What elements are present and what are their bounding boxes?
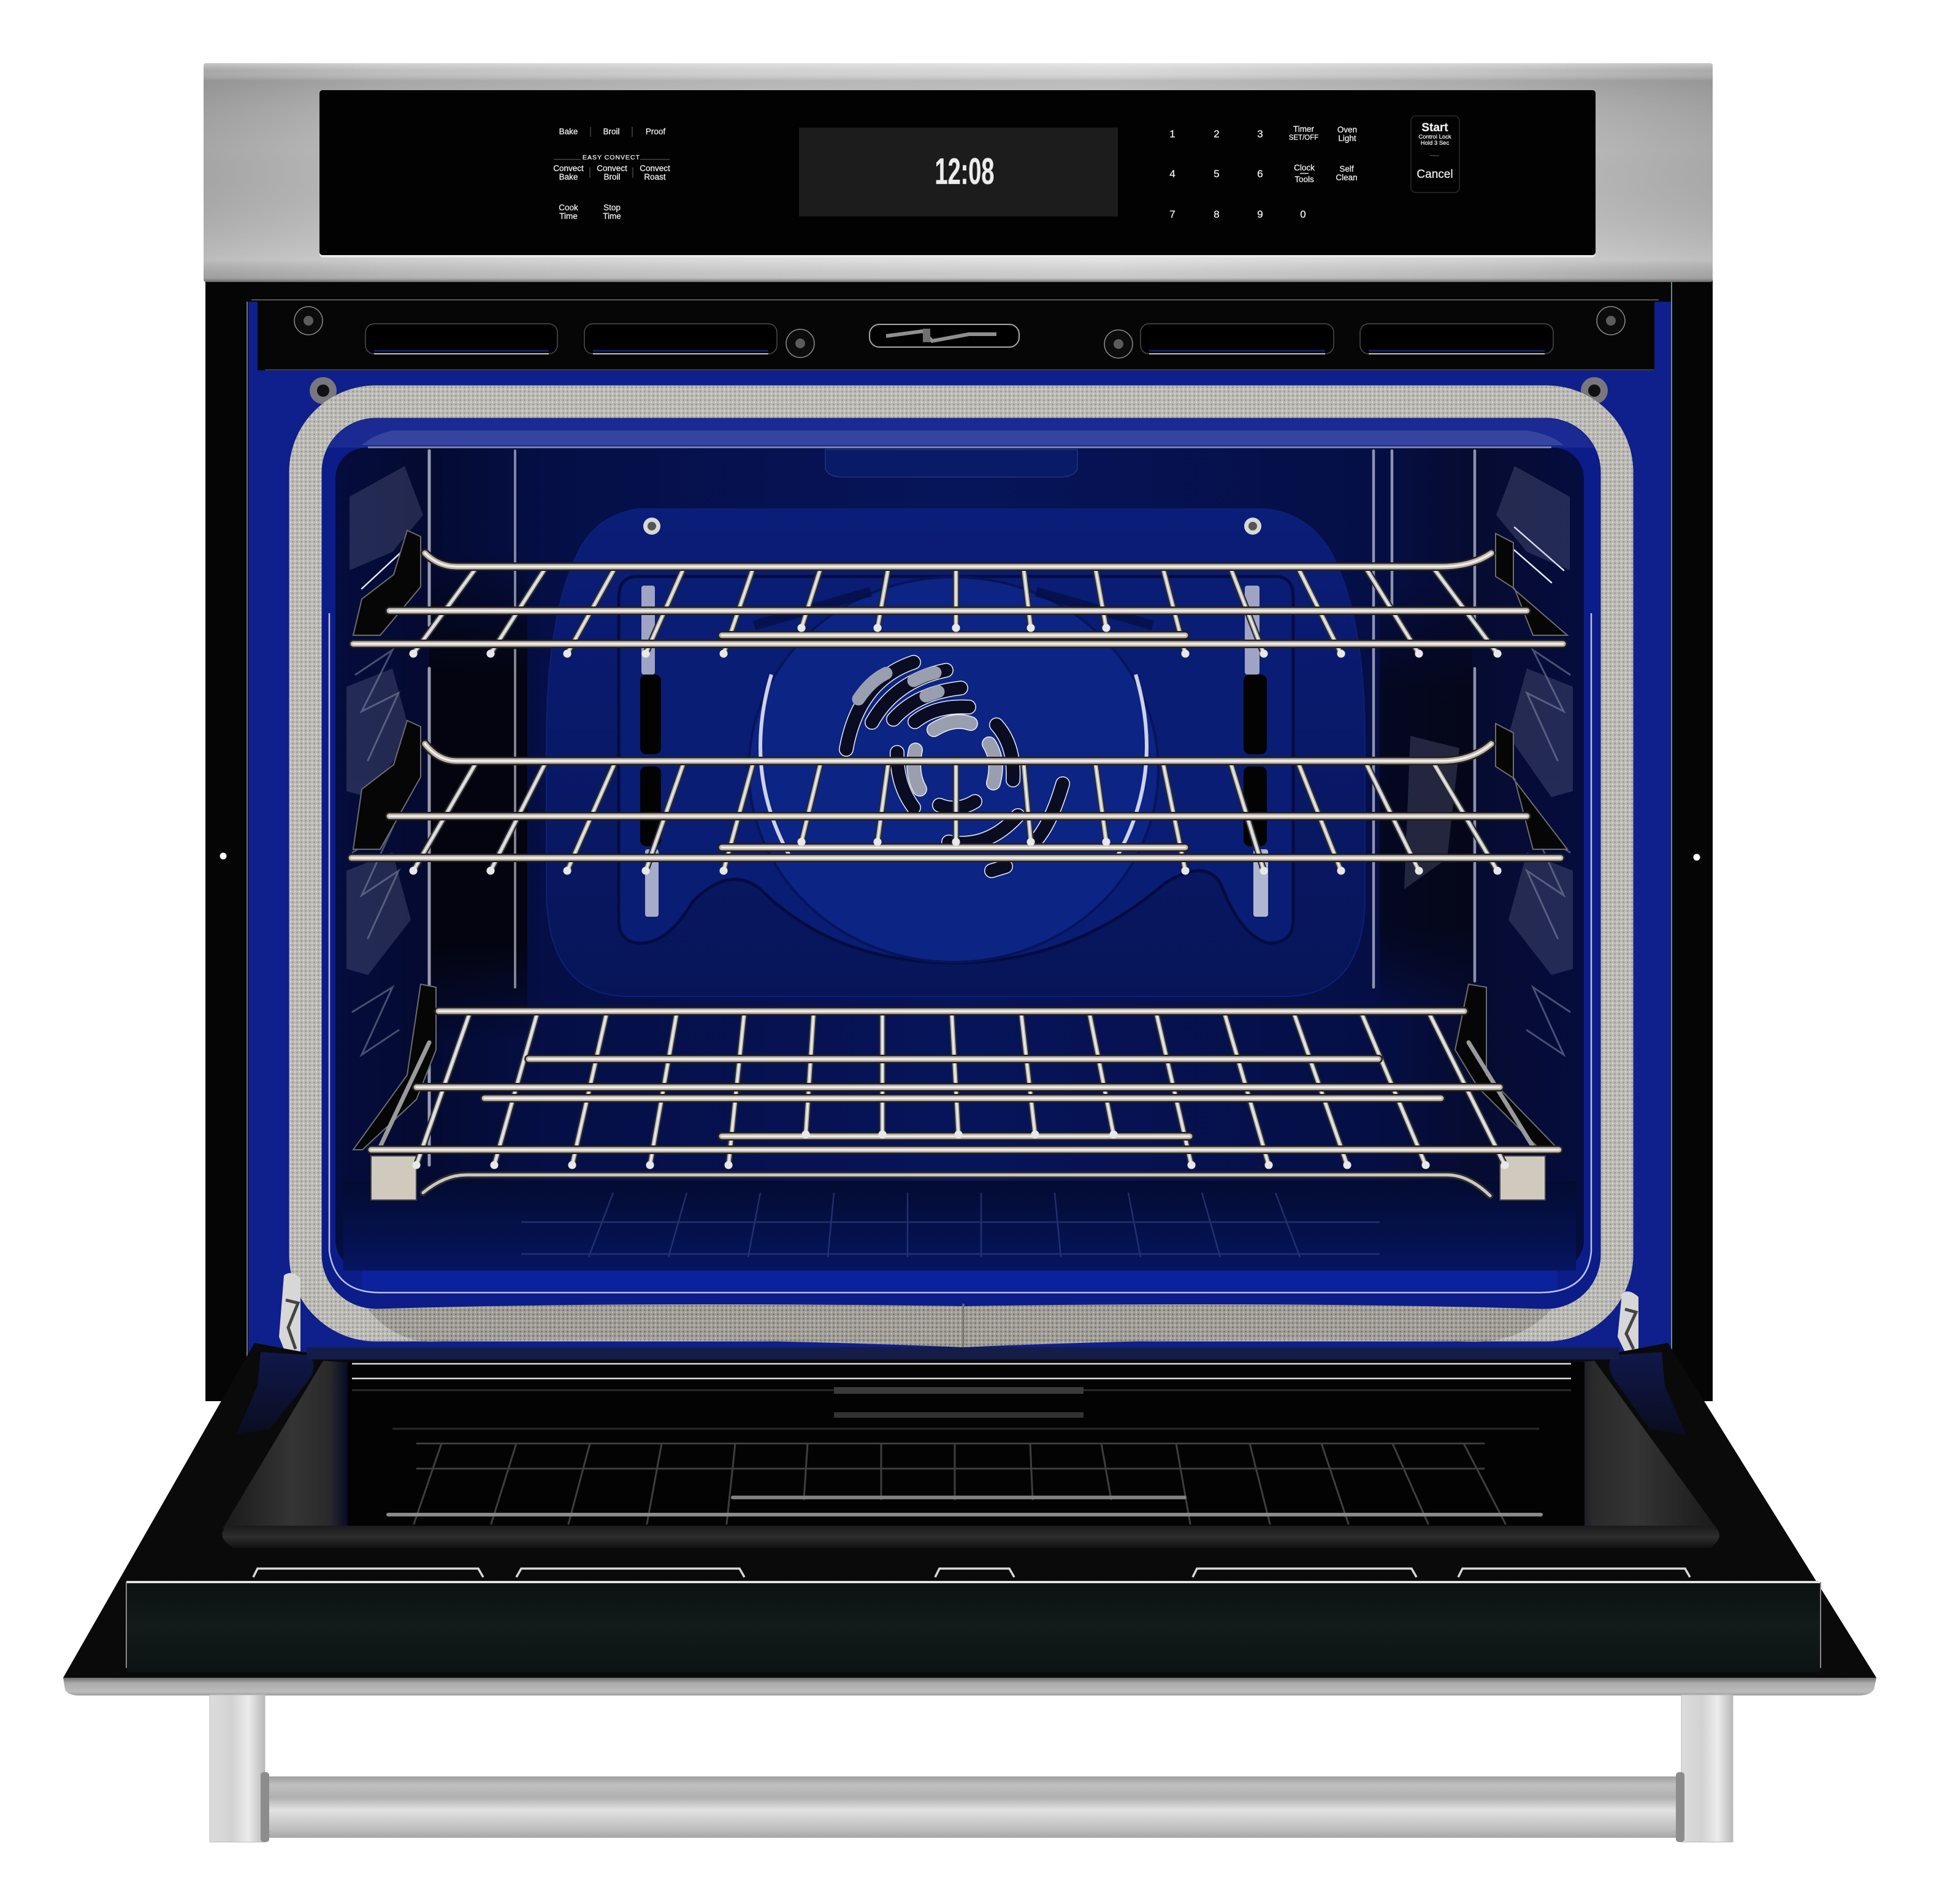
fan vent openings xyxy=(846,662,1063,871)
handle collars xyxy=(261,1772,1684,1842)
rack hook brackets xyxy=(353,530,1567,1150)
strip screws xyxy=(294,307,1625,358)
middle oven rack xyxy=(351,744,1561,871)
number keypad: 3 xyxy=(1257,128,1263,140)
dark side wall bands xyxy=(429,552,1472,1042)
number keypad: 7 xyxy=(1169,208,1176,220)
door top reflection xyxy=(236,1352,313,1435)
number keypad: 0 xyxy=(1300,208,1306,220)
handle bracket right xyxy=(1681,1695,1733,1842)
cooking mode labels: Time xyxy=(603,212,621,221)
number keypad: 4 xyxy=(1169,168,1176,180)
cooking mode labels: Roast xyxy=(644,172,666,182)
slide rail xyxy=(371,1042,1545,1200)
door handle xyxy=(210,1695,1733,1842)
function key labels xyxy=(1289,124,1358,184)
number keypad: 8 xyxy=(1214,208,1220,220)
reflected rack in door xyxy=(388,1443,1541,1524)
function key labels: Timer xyxy=(1293,124,1314,134)
cooking mode labels: Broil xyxy=(603,172,621,182)
start and cancel key: Cancel xyxy=(1416,168,1453,181)
cooking mode labels: Proof xyxy=(646,127,665,136)
cooking mode labels: Bake xyxy=(559,127,578,136)
handle bar xyxy=(261,1776,1684,1838)
function key labels: Self xyxy=(1339,164,1354,174)
number keypad: 5 xyxy=(1214,168,1220,180)
cooking mode labels: Broil xyxy=(603,127,620,136)
start and cancel key: Start xyxy=(1421,121,1448,134)
steel control panel xyxy=(204,63,1713,282)
function key labels: Clock xyxy=(1294,163,1315,172)
side wall embossed reflections xyxy=(346,466,1573,975)
steel door edge strip xyxy=(63,1678,1876,1696)
door inner bevels xyxy=(223,1361,348,1529)
function key labels: Clean xyxy=(1336,173,1358,182)
oven cavity interior xyxy=(335,446,1584,1271)
plate screws xyxy=(643,518,1261,535)
cooking mode labels: Convect xyxy=(597,164,627,173)
start and cancel key: Hold 3 Sec xyxy=(1421,140,1449,147)
door hinges xyxy=(279,1273,1638,1352)
door latch xyxy=(870,324,1019,347)
black control glass xyxy=(319,90,1596,258)
function key labels: Tools xyxy=(1294,175,1314,184)
number keypad: 9 xyxy=(1257,208,1263,220)
number keypad: 1 xyxy=(1169,128,1176,140)
top vent strip xyxy=(247,282,1671,370)
door inner rim xyxy=(222,1526,1719,1548)
side mounting holes xyxy=(220,852,1700,861)
clock time: 12:08 xyxy=(935,151,995,192)
handle bracket left xyxy=(210,1695,265,1842)
door inner glass xyxy=(348,1362,1585,1526)
cooking mode labels: Bake xyxy=(559,172,578,182)
upper cavity lip xyxy=(321,418,1600,448)
cooking mode labels: EASY CONVECT xyxy=(583,154,640,161)
convection back plate xyxy=(546,509,1365,996)
door body xyxy=(63,1343,1876,1678)
start and cancel key xyxy=(1411,116,1459,193)
wall highlights xyxy=(353,451,1570,1165)
display window xyxy=(799,128,1118,216)
recessed plate centre xyxy=(619,576,1293,963)
number keypad: 2 xyxy=(1214,128,1220,140)
open oven door xyxy=(63,1343,1876,1678)
cooking mode labels: Time xyxy=(559,212,578,221)
number keypad xyxy=(1169,128,1306,220)
cavity floor xyxy=(343,1181,1576,1271)
lower seal bulge xyxy=(368,1304,1551,1347)
cooking mode labels xyxy=(553,127,670,221)
function key labels: Light xyxy=(1338,134,1356,143)
upper oven rack xyxy=(353,553,1563,654)
cooking mode labels: Convect xyxy=(553,164,584,173)
door front panel xyxy=(126,1581,1821,1672)
blue enamel oven front xyxy=(248,300,1671,1355)
fan housing disc xyxy=(749,577,1158,962)
lower cavity lip xyxy=(329,613,1591,1293)
door seal gasket xyxy=(305,402,1617,1347)
lower sliding oven rack xyxy=(371,1011,1559,1200)
start and cancel key: Control Lock xyxy=(1418,134,1451,140)
function key labels: SET/OFF xyxy=(1289,134,1318,142)
back vent cover xyxy=(825,449,1077,477)
door seal grommets xyxy=(310,377,1608,404)
black oven body sides xyxy=(205,279,1713,1401)
cooking mode labels: Stop xyxy=(603,203,621,212)
cooking mode labels: Cook xyxy=(559,203,578,212)
door vent slots xyxy=(253,1569,1690,1577)
number keypad: 6 xyxy=(1257,168,1263,180)
cooking mode labels: Convect xyxy=(640,164,670,173)
function key labels: Oven xyxy=(1337,125,1357,134)
vent slots xyxy=(365,324,1553,354)
vent slots left and right xyxy=(640,586,1268,917)
